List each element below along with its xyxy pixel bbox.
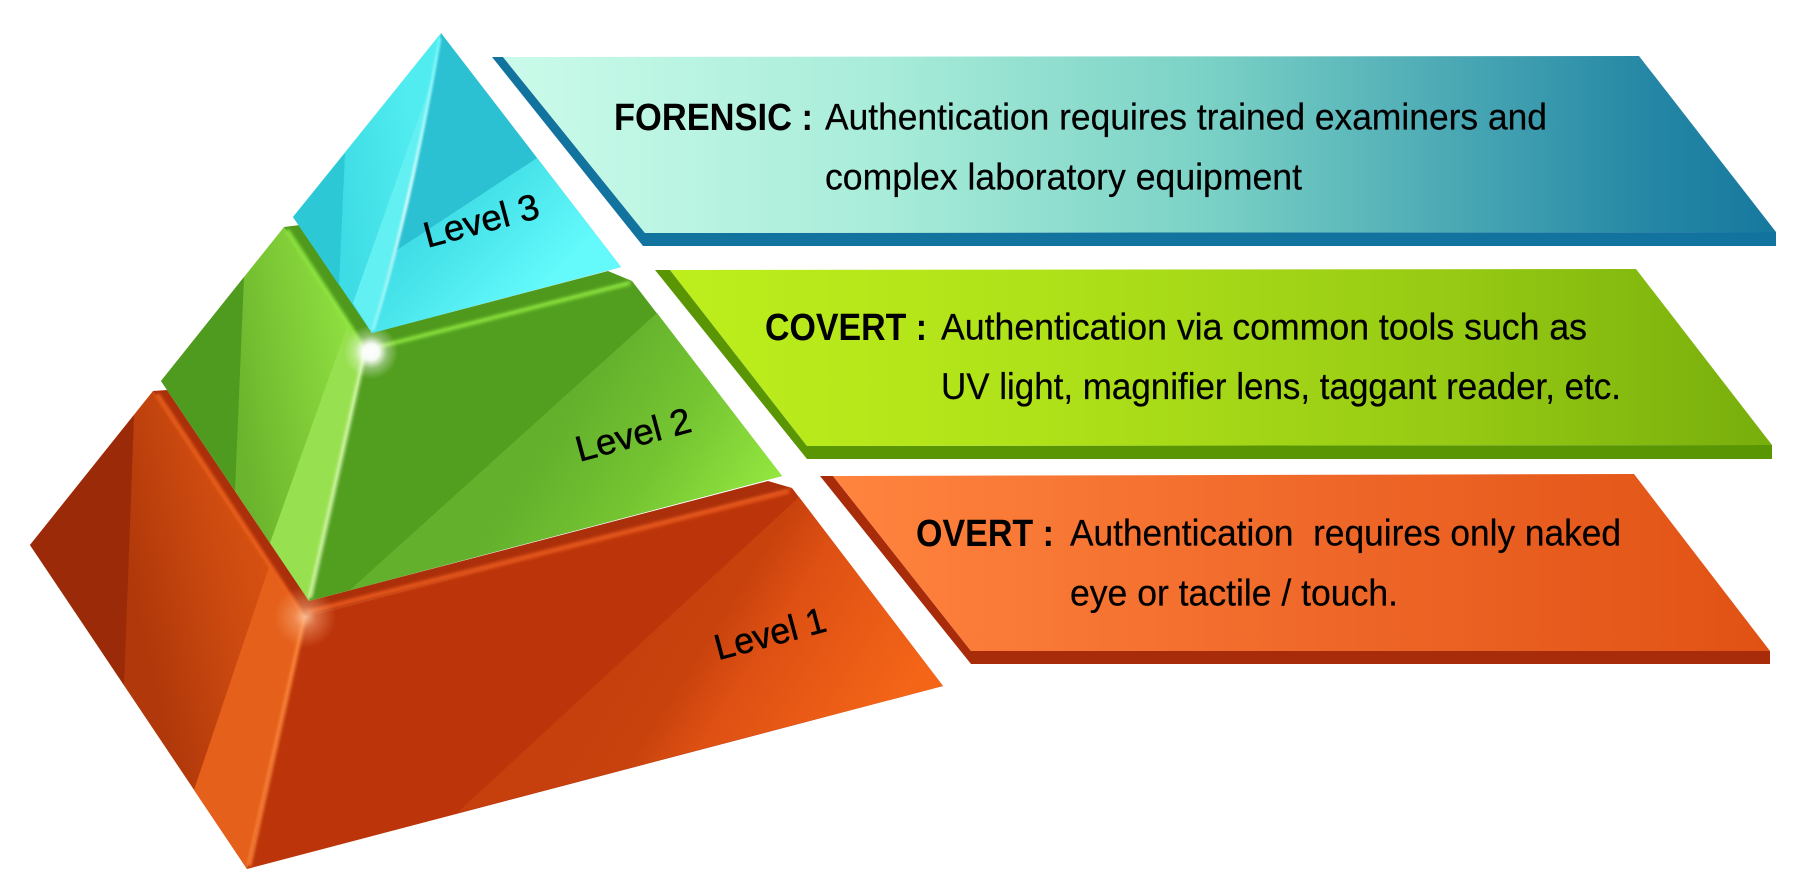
overt text: OVERT : bbox=[916, 513, 1054, 555]
overt text bbox=[916, 512, 1621, 614]
pyramid bbox=[30, 33, 943, 869]
level 1 base tier bbox=[30, 390, 943, 869]
level 2 label: Level 2 bbox=[571, 399, 695, 470]
forensic text bbox=[614, 96, 1547, 198]
overt text: eye or tactile / touch. bbox=[1070, 572, 1398, 614]
covert text: Authentication via common tools such as bbox=[941, 306, 1587, 348]
covert text bbox=[765, 306, 1621, 407]
forensic text: complex laboratory equipment bbox=[825, 156, 1303, 198]
forensic text: Authentication requires trained examiners and bbox=[825, 96, 1547, 138]
covert text: COVERT : bbox=[765, 307, 927, 349]
panel: covert bbox=[655, 269, 1772, 459]
level 3 top tier bbox=[293, 33, 621, 333]
panel: overt bbox=[820, 474, 1770, 664]
panel: forensic bbox=[492, 56, 1776, 246]
forensic text: FORENSIC : bbox=[614, 97, 813, 139]
level 1 label: Level 1 bbox=[710, 599, 830, 668]
covert text: UV light, magnifier lens, taggant reader, etc. bbox=[941, 366, 1621, 407]
overt text: Authentication requires only naked bbox=[1070, 512, 1621, 554]
level 2 middle tier bbox=[161, 225, 782, 601]
level 3 label: Level 3 bbox=[419, 185, 543, 256]
